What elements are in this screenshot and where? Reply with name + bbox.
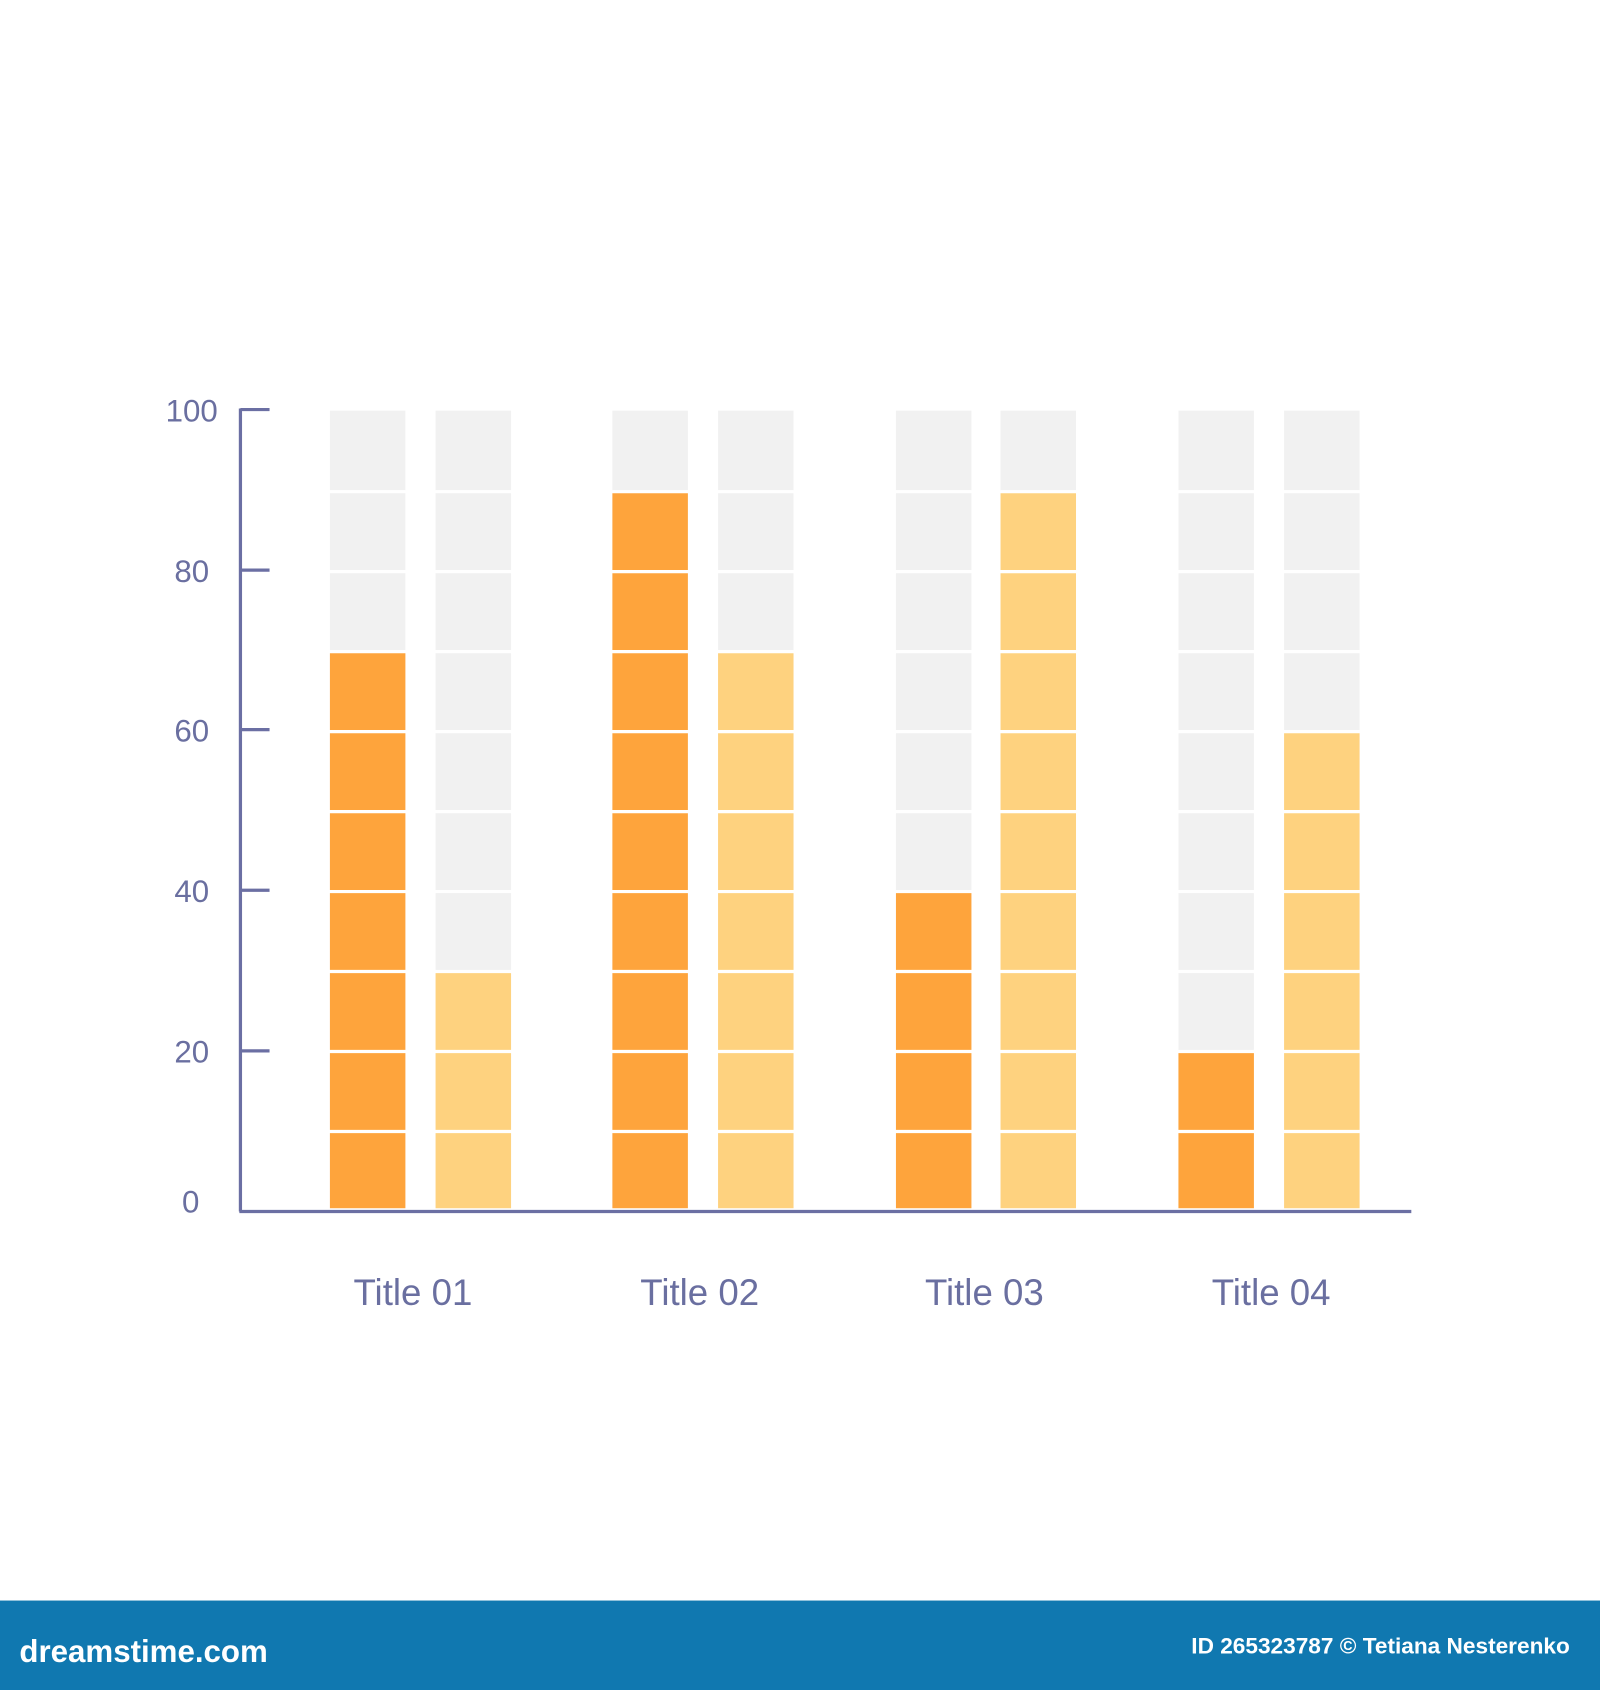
- x-axis titles: [354, 1272, 1331, 1313]
- footer bar: ID 265323787 © Tetiana Nesterenko: [1191, 1633, 1570, 1658]
- y-axis labels: 40: [174, 874, 209, 909]
- x-axis titles: Title 03: [925, 1272, 1044, 1313]
- y-axis labels: 20: [174, 1035, 209, 1070]
- y-axis labels: [166, 393, 218, 1220]
- y-axis labels: 0: [182, 1185, 199, 1220]
- bars: Title 03: [896, 411, 1076, 1208]
- x-axis titles: Title 01: [354, 1272, 472, 1313]
- footer bar: [0, 1601, 1600, 1690]
- x-axis titles: Title 02: [640, 1272, 759, 1313]
- x-axis titles: Title 04: [1212, 1272, 1331, 1313]
- footer bar: dreamstime.com: [19, 1634, 268, 1669]
- bars: Title 02: [612, 411, 794, 1208]
- bars: Title 04: [1178, 411, 1360, 1208]
- y-axis labels: 60: [174, 714, 209, 749]
- bars: Title 01: [330, 411, 511, 1208]
- y-axis labels: 100: [166, 393, 218, 428]
- chart: bar groups: [323, 411, 1369, 1208]
- y-axis labels: 80: [174, 554, 209, 589]
- axes: [239, 408, 1411, 1211]
